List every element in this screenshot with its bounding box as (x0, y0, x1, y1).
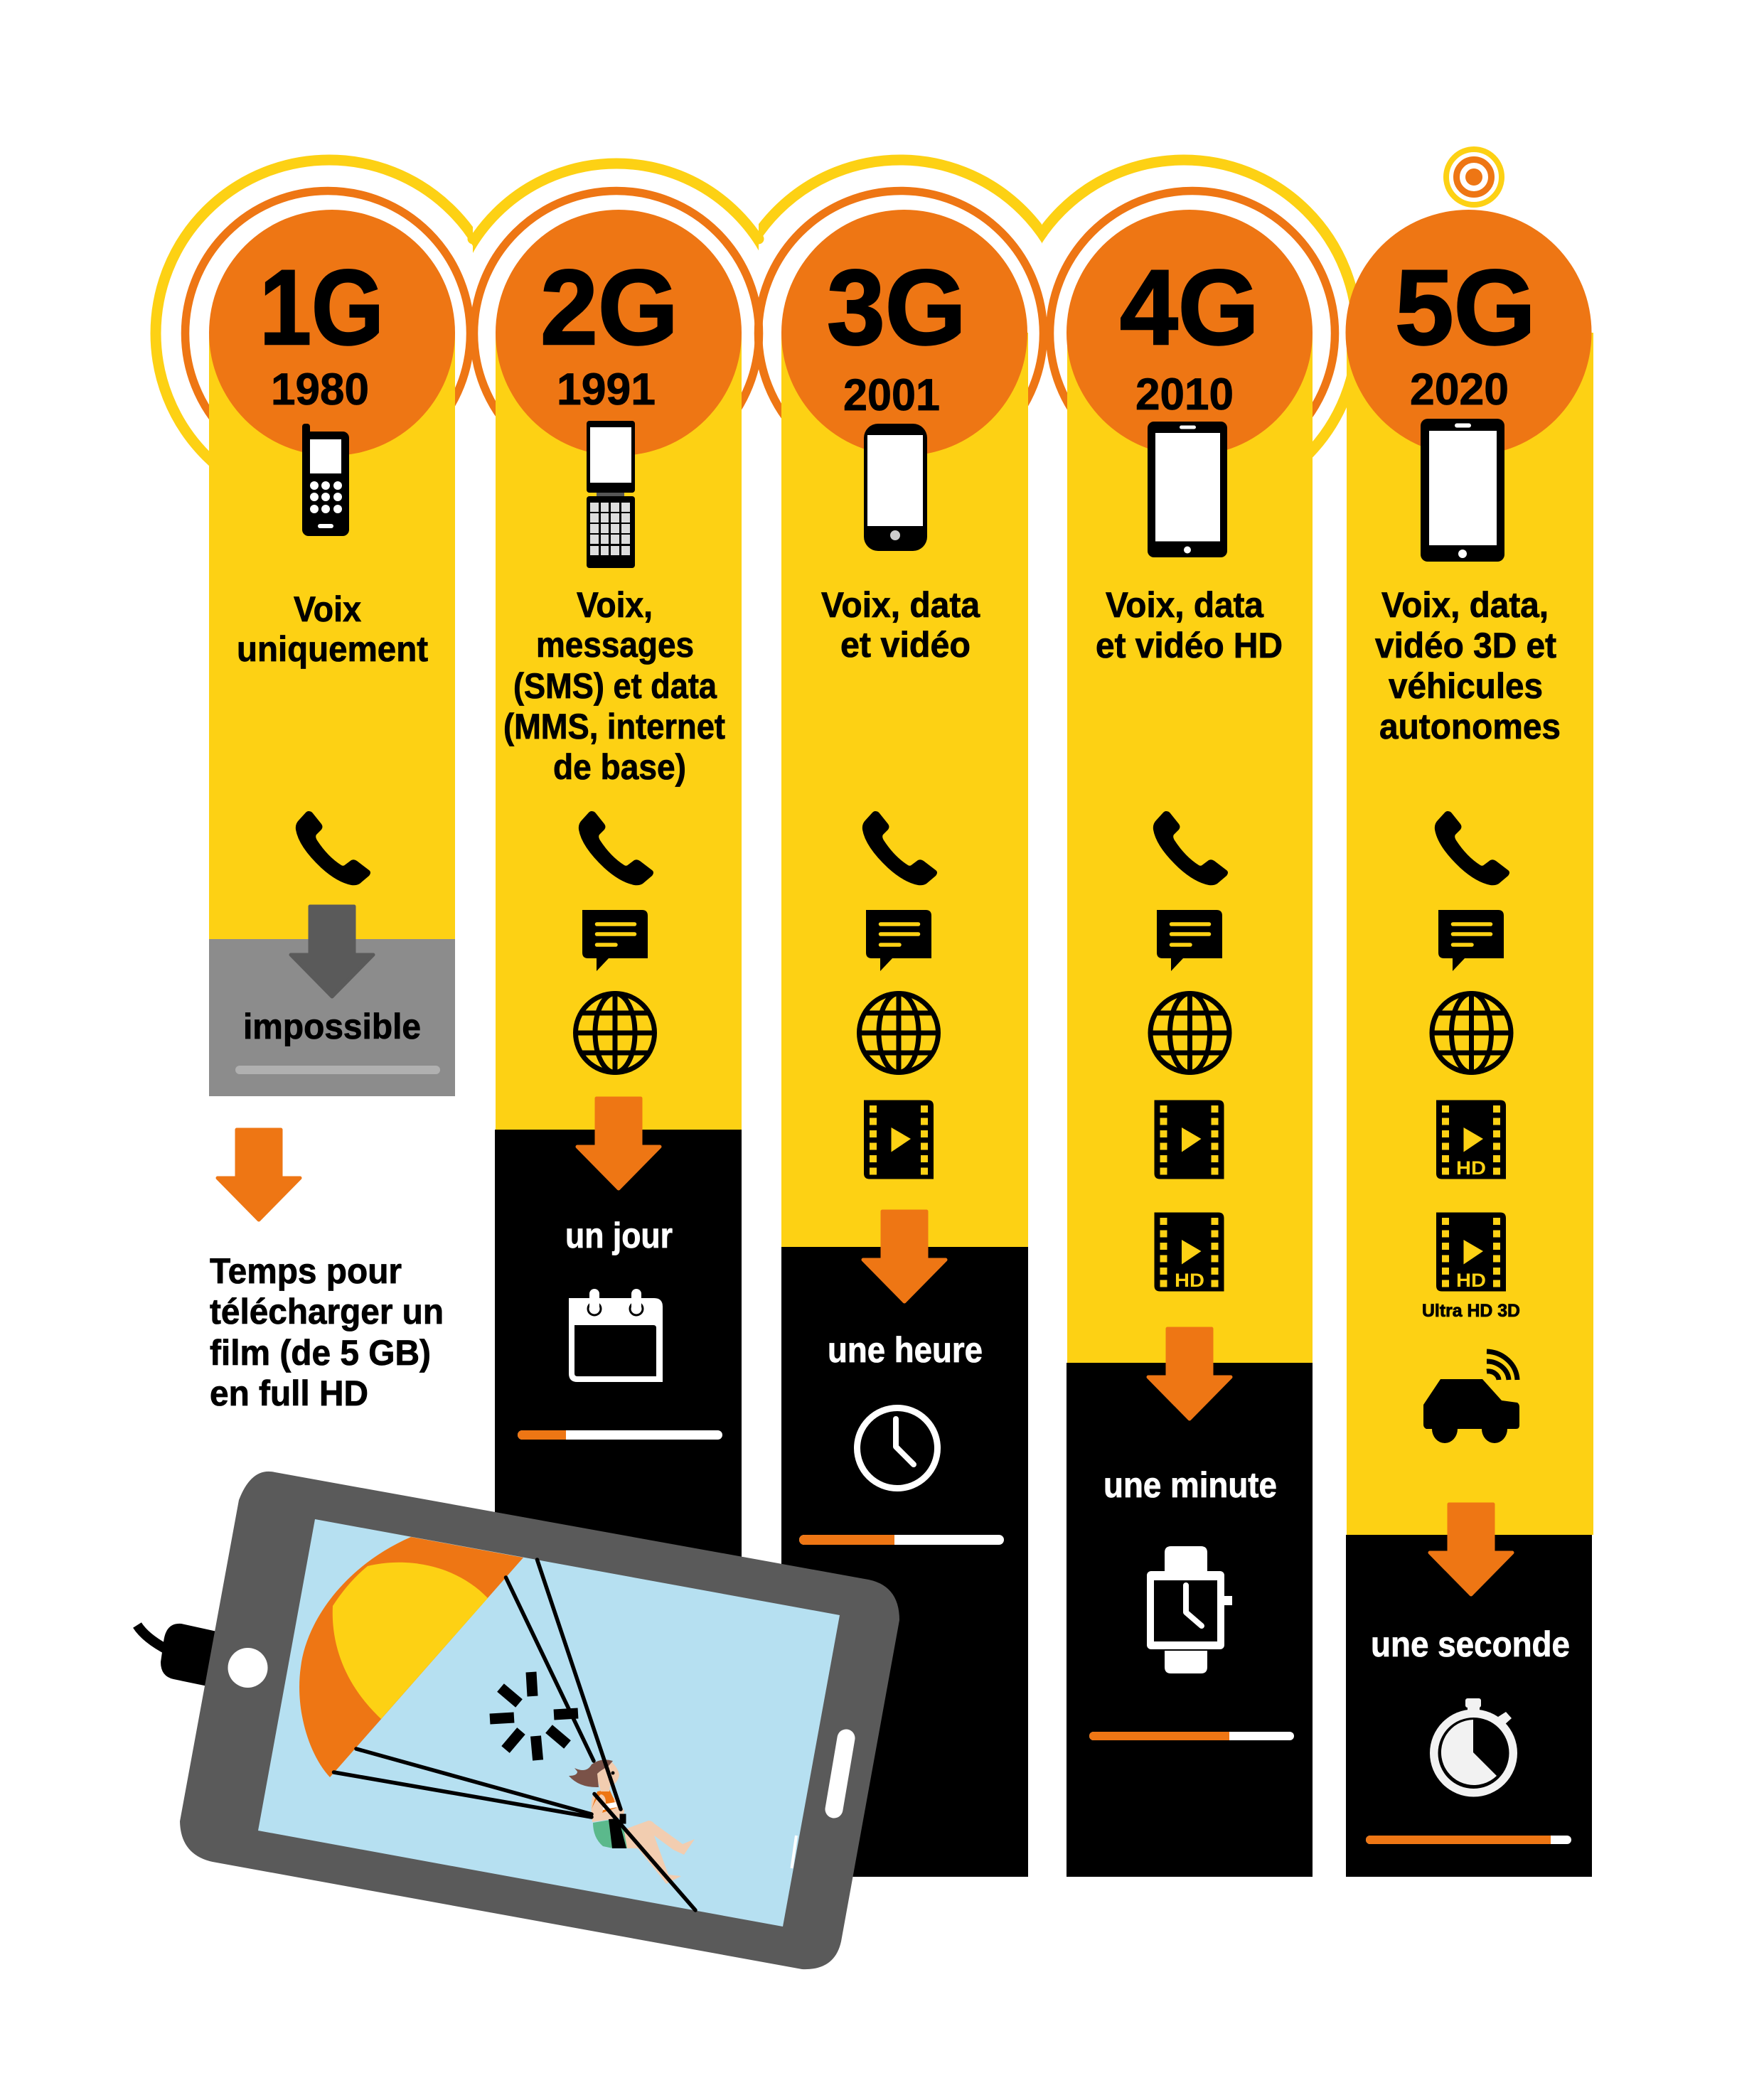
loading spinner (490, 1672, 578, 1760)
column background (781, 210, 1028, 1877)
icon: smartwatch (1147, 1546, 1232, 1673)
text: uses 5G (1375, 585, 1561, 746)
column background (495, 210, 742, 1877)
tablet screen (258, 1519, 840, 1927)
column background (209, 210, 455, 1096)
legend text: en full HD (210, 1373, 368, 1413)
icon: HD video 3D: HD (1456, 1270, 1486, 1291)
icon: call (1435, 811, 1509, 885)
icon: HD video: HD (1175, 1270, 1204, 1291)
text: uses 5G: Voix, data, (1381, 585, 1549, 625)
text: uses 3G (821, 585, 980, 665)
icon: video (1155, 1100, 1224, 1179)
progress bar (1089, 1732, 1294, 1740)
heading 2G: 2G (540, 247, 678, 367)
text: uses 2G: de base) (553, 747, 686, 787)
text: uses 2G (503, 585, 725, 787)
icon: early mobile phone (302, 424, 349, 536)
parachute (299, 1537, 523, 1777)
column 3G (781, 210, 1028, 1877)
home button (228, 1648, 267, 1688)
progress bar (1366, 1836, 1571, 1844)
column 5G (1345, 149, 1593, 1877)
text: uses 1G (237, 589, 428, 669)
text: uses 5G: autonomes (1379, 707, 1561, 746)
text: uses 4G: et vidéo HD (1096, 626, 1283, 665)
torso (592, 1790, 624, 1822)
text: uses 2G: (MMS, internet (503, 707, 725, 746)
harness strap (609, 1818, 626, 1848)
year 2020: 2020 (1410, 365, 1509, 414)
icon: internet globe (859, 994, 939, 1072)
parachute lines (334, 1560, 695, 1910)
legs (621, 1821, 695, 1884)
text: uses 4G (1096, 585, 1283, 665)
shorts (593, 1820, 627, 1848)
icon: target signal (1446, 149, 1502, 205)
cable and plug (137, 1624, 217, 1686)
year 1980: 1980 (271, 365, 369, 414)
icon: flip phone (587, 421, 635, 568)
icon: stopwatch (1430, 1698, 1517, 1797)
column 2G (495, 210, 742, 1877)
text: une seconde: une seconde (1371, 1624, 1570, 1664)
icon: HD video (1155, 1213, 1224, 1291)
text: uses 3G: Voix, data (821, 585, 980, 625)
icon: smartphone (1148, 422, 1227, 557)
screen glint (792, 1836, 796, 1868)
arrow (1148, 1329, 1231, 1419)
icon: clock (857, 1408, 937, 1489)
signal rings behind the columns (156, 160, 1357, 507)
text: uses 4G: Voix, data (1106, 585, 1264, 625)
progress bar (518, 1430, 722, 1440)
text: uses 5G: véhicules (1389, 666, 1543, 706)
icon: call (1153, 811, 1228, 885)
column background (1067, 210, 1313, 1877)
heading 1G: 1G (260, 247, 384, 367)
icon: HD video: HD (1456, 1157, 1486, 1179)
arrow: grey (291, 906, 373, 997)
tablet illustration (137, 1472, 899, 1969)
column 4G (1067, 210, 1313, 1877)
tablet body (180, 1472, 899, 1969)
text: uses 5G: vidéo 3D et (1375, 626, 1556, 665)
text: une minute: une minute (1103, 1465, 1277, 1505)
arrow (577, 1098, 660, 1189)
neck and face (597, 1762, 619, 1791)
text: uses 1G: Voix (294, 589, 361, 629)
text: uses 1G: uniquement (237, 629, 428, 669)
icon: smartphone (864, 424, 927, 551)
year 1991: 1991 (557, 365, 656, 414)
text: uses 2G: Voix, (577, 585, 653, 625)
hair (569, 1759, 613, 1787)
icon: HD video 3D (1436, 1213, 1506, 1291)
icon: internet globe (1150, 994, 1229, 1072)
icon: calendar (569, 1289, 663, 1382)
icon: connected car (1423, 1351, 1519, 1443)
column 1G (209, 210, 455, 1096)
text: uses 2G: (SMS) et data (513, 666, 717, 706)
icon: message (866, 910, 931, 971)
icon: smartphone (1421, 419, 1504, 562)
icon: internet globe (1432, 994, 1511, 1072)
text: Ultra HD 3D: Ultra HD 3D (1422, 1301, 1520, 1321)
heading 4G: 4G (1120, 247, 1259, 367)
text: un jour: un jour (565, 1216, 673, 1255)
heading 5G: 5G (1395, 247, 1536, 367)
column background (1345, 210, 1593, 1877)
arrow (1430, 1504, 1512, 1595)
legend arrow (218, 1130, 300, 1220)
text: uses 3G: et vidéo (840, 625, 971, 665)
progress bar (799, 1535, 1004, 1545)
icon: message (1438, 910, 1504, 971)
icon: call (862, 811, 937, 885)
year 2010: 2010 (1135, 370, 1234, 419)
icon: message (582, 910, 648, 971)
icon: internet globe (576, 994, 654, 1072)
text: une heure: une heure (828, 1330, 983, 1370)
vest stripe (603, 1802, 617, 1810)
icon: message (1157, 910, 1222, 971)
icon: HD video (1436, 1100, 1506, 1179)
parasailer (569, 1759, 695, 1884)
vest (592, 1789, 616, 1813)
text: impossible: impossible (243, 1007, 421, 1046)
year 2001: 2001 (843, 370, 940, 420)
legend text: film (de 5 GB) (210, 1333, 431, 1373)
legend text: télécharger un (210, 1292, 444, 1332)
heading 3G: 3G (827, 247, 966, 367)
arrow (863, 1211, 946, 1302)
text: uses 2G: messages (536, 625, 694, 665)
side button (834, 1738, 846, 1809)
legend text (210, 1251, 444, 1413)
legend text: Temps pour (210, 1251, 402, 1291)
icon: call (296, 811, 370, 885)
icon: video (864, 1100, 934, 1179)
progress bar empty (235, 1066, 440, 1074)
icon: call (579, 811, 653, 885)
